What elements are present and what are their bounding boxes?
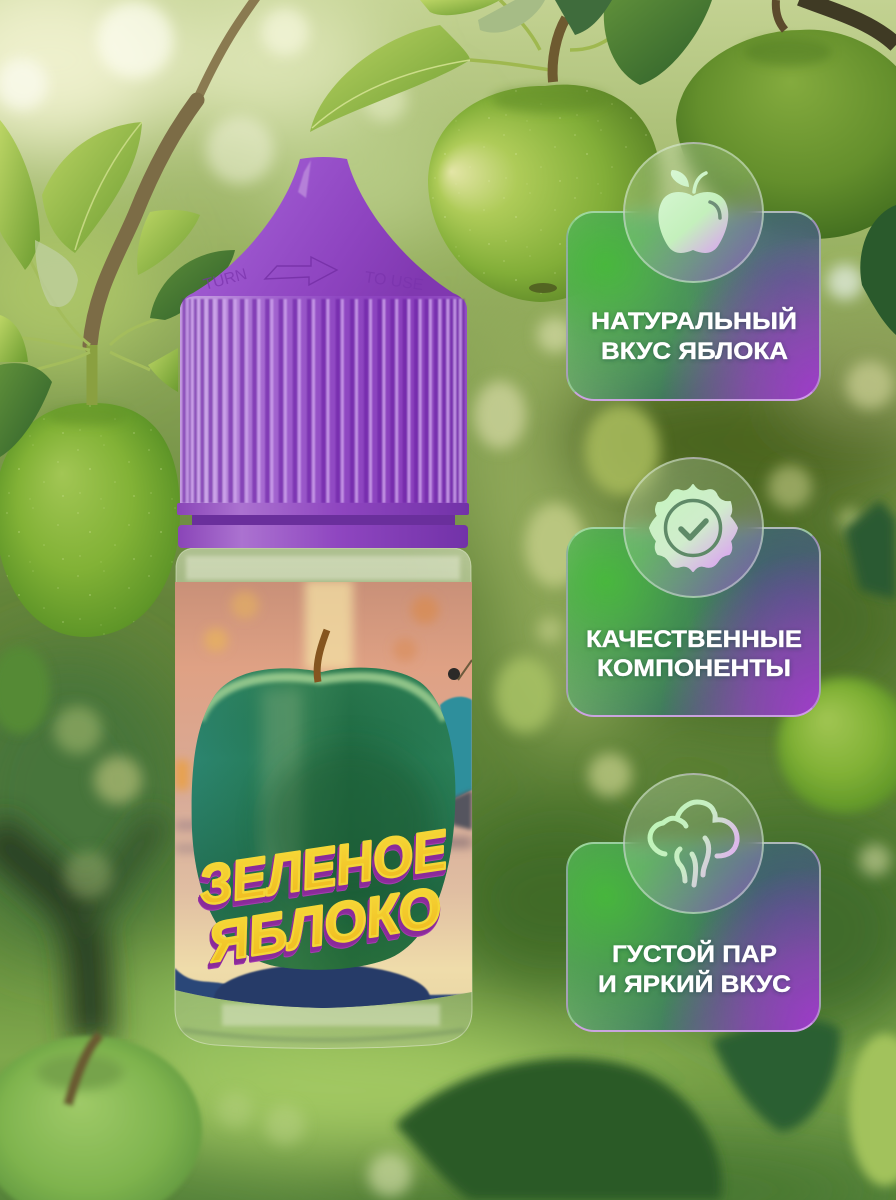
label background glow xyxy=(175,580,472,852)
icon: apple xyxy=(658,170,728,253)
apple: top center xyxy=(428,85,660,302)
cap flange xyxy=(177,503,469,515)
apple: left xyxy=(0,403,180,637)
label apple xyxy=(192,668,455,970)
label apple shadow xyxy=(214,966,430,1008)
card 2 icon disc xyxy=(623,457,764,598)
cap skirt xyxy=(180,296,467,504)
apple: bottom left xyxy=(0,1035,202,1200)
branch and leaves: top center xyxy=(310,0,896,132)
branch and leaves: top left xyxy=(0,0,258,457)
label: quality components: КАЧЕСТВЕННЫЕ xyxy=(586,626,802,653)
bottle label xyxy=(175,580,472,1032)
card 3 icon disc xyxy=(623,773,764,914)
title line 2: ЯБЛОКО xyxy=(202,875,445,974)
label: quality components xyxy=(586,626,802,682)
dark leaf right edge xyxy=(860,205,896,335)
teal object behind apple xyxy=(440,697,472,800)
label title xyxy=(194,817,453,974)
icon: quality badge with check xyxy=(650,485,737,571)
card 1 icon disc xyxy=(623,142,764,283)
icon: cloud of vapor xyxy=(650,802,737,885)
navy base xyxy=(175,968,465,1008)
label apple stem xyxy=(317,630,327,682)
card 2 glass panel xyxy=(566,527,821,717)
tree trunk xyxy=(0,820,160,1040)
cap embossed arrow xyxy=(265,257,337,285)
label: natural apple taste xyxy=(591,307,797,365)
cap neck xyxy=(192,512,455,528)
cap nozzle highlight xyxy=(298,160,311,198)
card 1 glass panel xyxy=(566,211,821,401)
bottle glass body xyxy=(175,548,472,1048)
glass shoulder reflection xyxy=(186,556,460,580)
card labels xyxy=(586,307,802,998)
background apples xyxy=(0,500,896,1200)
bottle cap xyxy=(177,157,469,548)
label: natural apple taste: ВКУС ЯБЛОКА xyxy=(601,338,788,365)
cap embossed text: TURN xyxy=(202,266,249,294)
glass base reflection xyxy=(182,1004,465,1040)
cap embossed text: TO USE xyxy=(363,269,425,294)
cap cone xyxy=(180,157,467,310)
label: natural apple taste: НАТУРАЛЬНЫЙ xyxy=(591,307,797,335)
cap embossed text xyxy=(202,266,425,294)
card 3 glass panel xyxy=(566,842,821,1032)
label: thick vapor and bright taste: И ЯРКИЙ ВКУС xyxy=(598,970,791,998)
label: quality components: КОМПОНЕНТЫ xyxy=(597,655,791,682)
cap ring xyxy=(178,525,468,548)
product bottle xyxy=(174,157,472,1049)
label: thick vapor and bright taste: ГУСТОЙ ПАР xyxy=(612,940,777,968)
label: thick vapor and bright taste xyxy=(598,940,791,998)
apple: top right xyxy=(676,30,896,239)
title line 1: ЗЕЛЕНОЕ xyxy=(194,817,453,917)
cap ribs xyxy=(185,299,462,503)
